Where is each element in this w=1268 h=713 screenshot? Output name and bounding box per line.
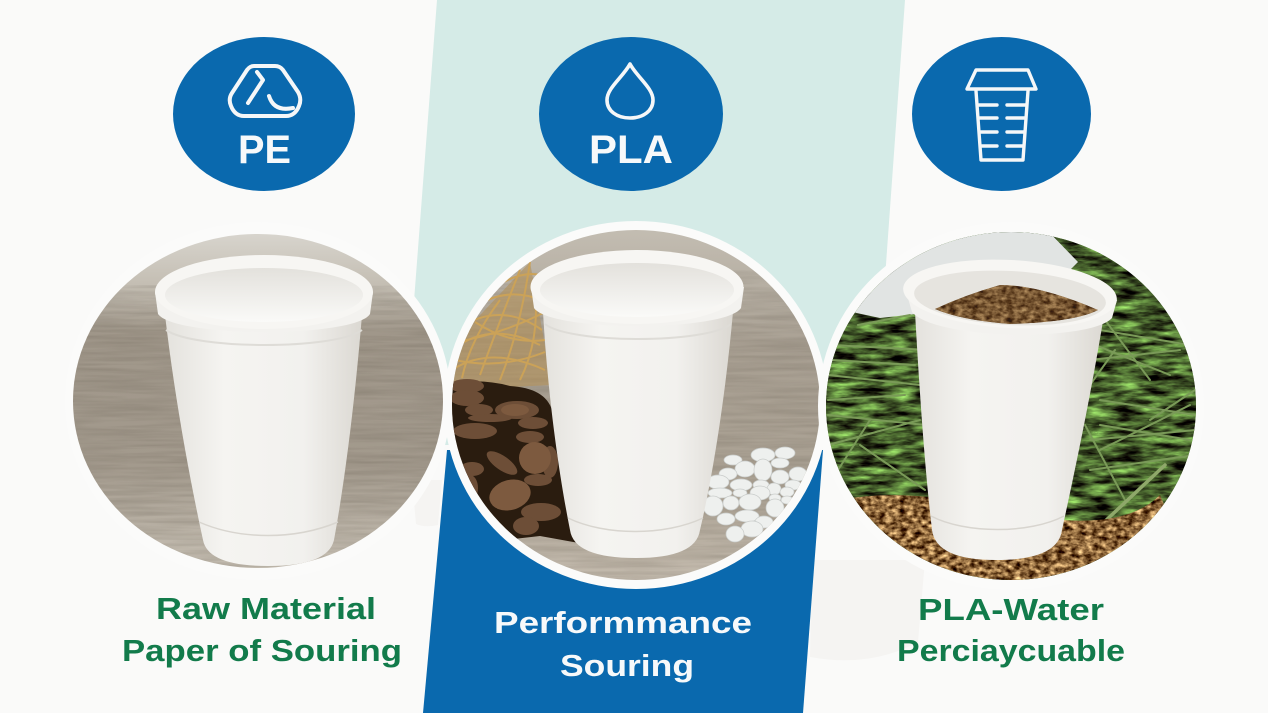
icon: recycling symbol [230, 66, 300, 116]
caption: Performmance Souring: Souring [560, 648, 694, 683]
cup: plain white [530, 250, 744, 558]
grass blades [828, 300, 1195, 500]
photo ring: cup in grass with soil [818, 222, 1204, 590]
label: PLA: PLA [589, 128, 673, 172]
badge: PLA [539, 37, 723, 191]
white pebbles [703, 447, 807, 542]
white cloth [852, 228, 1078, 318]
caption: Performmance Souring [494, 605, 752, 683]
badge: PE [173, 37, 355, 191]
panel: PLA performance [444, 37, 830, 683]
caption: Raw Material Paper of Souring: Raw Material [156, 591, 376, 626]
caption: Performmance Souring: Performmance [494, 605, 752, 640]
badge: measuring cup [912, 37, 1091, 191]
caption: Raw Material Paper of Souring [122, 591, 402, 668]
straw [450, 262, 552, 390]
panel: PE raw material [65, 37, 451, 668]
blue centre band [423, 450, 823, 713]
panel: PLA water [818, 37, 1204, 668]
soil ground [854, 495, 1164, 580]
caption: PLA-Water Perciaycuable: Perciaycuable [897, 633, 1125, 668]
soil in cup [935, 285, 1098, 324]
background: faint cups [412, 480, 925, 660]
teal centre band [403, 0, 905, 445]
label: PE: PE [238, 128, 291, 172]
cocoa-like brown chips [452, 379, 576, 542]
icon: measuring cup with lid [967, 70, 1036, 160]
caption: Raw Material Paper of Souring: Paper of Souring [122, 633, 402, 668]
caption: PLA-Water Perciaycuable: PLA-Water [918, 592, 1104, 627]
cup: filled with soil [901, 254, 1119, 560]
cup: plain white [155, 255, 373, 566]
icon: water drop [607, 64, 653, 118]
photo ring: cup with raw materials [444, 221, 830, 589]
photo ring: cup on wood [65, 222, 451, 580]
caption: PLA-Water Perciaycuable [897, 592, 1125, 668]
